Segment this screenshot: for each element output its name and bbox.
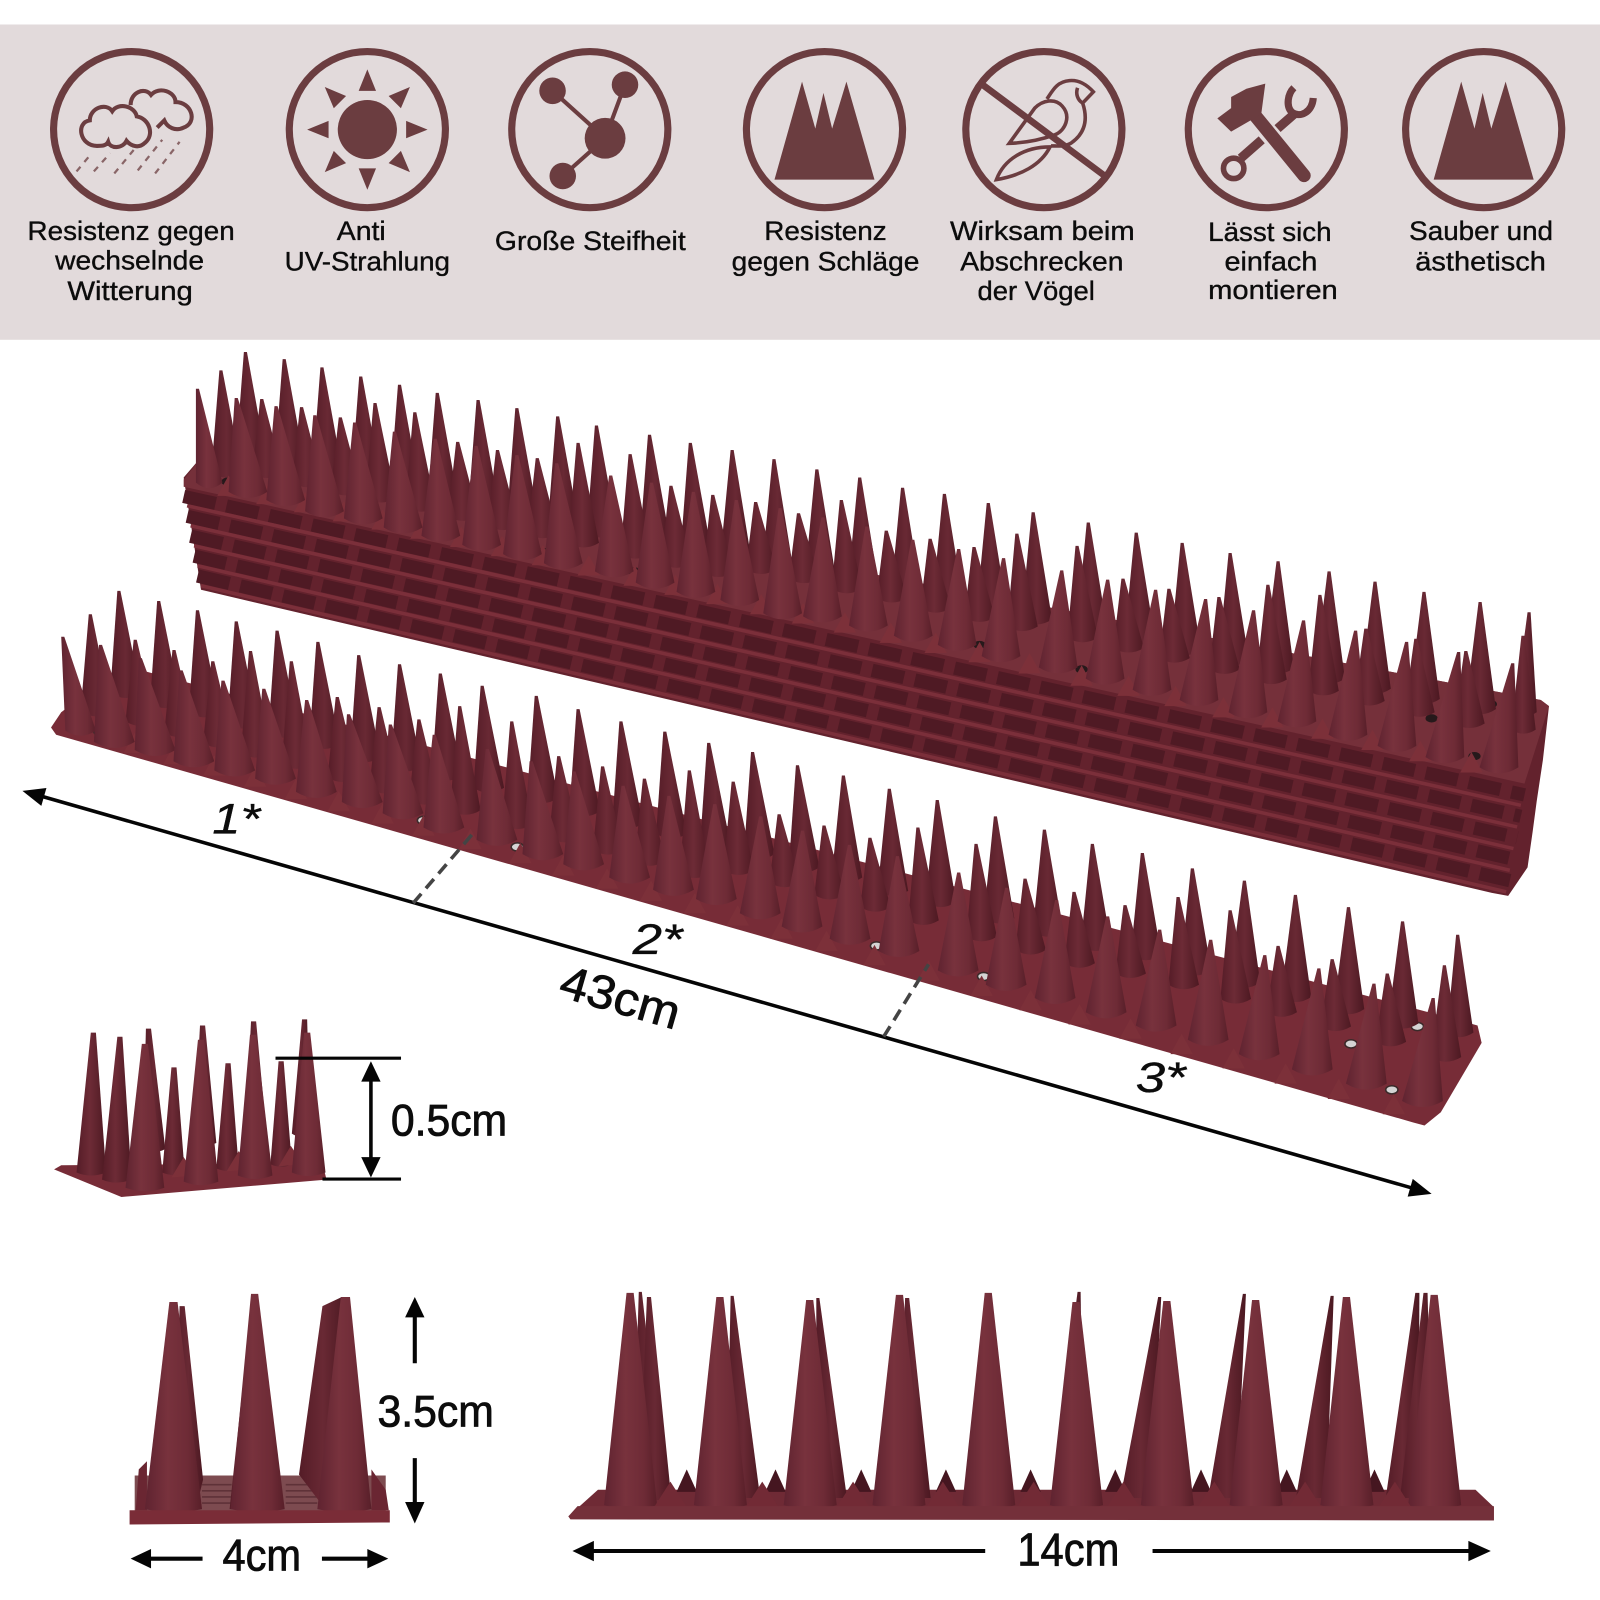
label: Wirksam beim Abschrecken der Vögel: der Vögel xyxy=(978,276,1095,306)
label: Sauber und ästhetisch: ästhetisch xyxy=(1415,246,1546,276)
label: Anti UV-Strahlung xyxy=(285,216,450,276)
label: Resistenz gegen Schläge xyxy=(732,216,919,276)
icon: molecule xyxy=(512,52,668,208)
label: section 3: 3* xyxy=(1136,1054,1187,1102)
feature: easy mounting xyxy=(1188,52,1344,305)
label: Sauber und ästhetisch: Sauber und xyxy=(1409,216,1553,246)
product photo: side crop with height dimension xyxy=(54,1019,327,1197)
label: Resistenz gegen wechselnde Witterung: Witterung xyxy=(67,276,193,306)
feature: clean and aesthetic xyxy=(1406,52,1562,276)
feature: anti UV xyxy=(285,52,450,276)
icon: clouds and rain xyxy=(54,52,210,208)
label: section 2: 2* xyxy=(631,916,684,964)
product photo: end view with width and height xyxy=(130,1294,390,1524)
dimension: 3.5cm height: 3.5cm xyxy=(378,1386,494,1437)
icon: sun xyxy=(289,52,445,208)
label: Anti UV-Strahlung: UV-Strahlung xyxy=(285,246,450,276)
label: Anti UV-Strahlung: Anti xyxy=(337,216,386,246)
product photo: single strip of three sections xyxy=(51,591,1482,1126)
label: 43cm: 43cm xyxy=(554,956,686,1039)
panel: feature band xyxy=(0,24,1600,340)
label: Sauber und ästhetisch xyxy=(1409,216,1553,276)
label: Wirksam beim Abschrecken der Vögel: Abschrecken xyxy=(960,246,1123,276)
dimension: 14cm length: 14cm xyxy=(1017,1523,1119,1575)
dimension: 3.5cm height xyxy=(378,1297,494,1523)
icon: spikes xyxy=(746,52,903,208)
label: Resistenz gegen wechselnde Witterung xyxy=(28,216,235,306)
label: Resistenz gegen wechselnde Witterung: Resistenz gegen xyxy=(28,216,235,246)
label: Lässt sich einfach montieren xyxy=(1208,217,1338,305)
arrow: 43cm total length xyxy=(22,788,1432,1197)
label: Resistenz gegen wechselnde Witterung: wechselnde xyxy=(54,245,204,275)
icon: spikes xyxy=(1406,52,1562,208)
product photo: stacked spike strips xyxy=(184,352,1549,896)
label: Resistenz gegen Schläge: Resistenz xyxy=(764,216,887,246)
product photo: long side view xyxy=(568,1292,1494,1520)
feature: deterring birds xyxy=(950,52,1135,306)
section dividers xyxy=(413,832,929,1037)
dimension: 0.5cm height xyxy=(276,1058,507,1179)
label: Resistenz gegen Schläge: gegen Schläge xyxy=(732,246,919,276)
dimension: 4cm width xyxy=(131,1529,388,1580)
feature: stiffness xyxy=(495,52,686,256)
feature: weather resistance xyxy=(28,52,235,306)
dimension: 0.5cm height: 0.5cm xyxy=(391,1095,507,1146)
label: Wirksam beim Abschrecken der Vögel: Wirksam beim xyxy=(950,216,1135,246)
label: Wirksam beim Abschrecken der Vögel xyxy=(950,216,1135,306)
label: section 1: 1* xyxy=(212,796,262,844)
label: Lässt sich einfach montieren: einfach xyxy=(1224,246,1317,276)
feature: impact resistance xyxy=(732,52,919,276)
label: Große Steifheit: Große Steifheit xyxy=(495,226,686,256)
label: Lässt sich einfach montieren: montieren xyxy=(1208,275,1338,305)
icon: hammer and wrench xyxy=(1188,52,1344,208)
dimension: 14cm length xyxy=(572,1523,1491,1575)
label: Lässt sich einfach montieren: Lässt sich xyxy=(1208,217,1332,247)
dimension: 4cm width: 4cm xyxy=(222,1529,301,1580)
icon: crossed out bird xyxy=(966,52,1122,208)
